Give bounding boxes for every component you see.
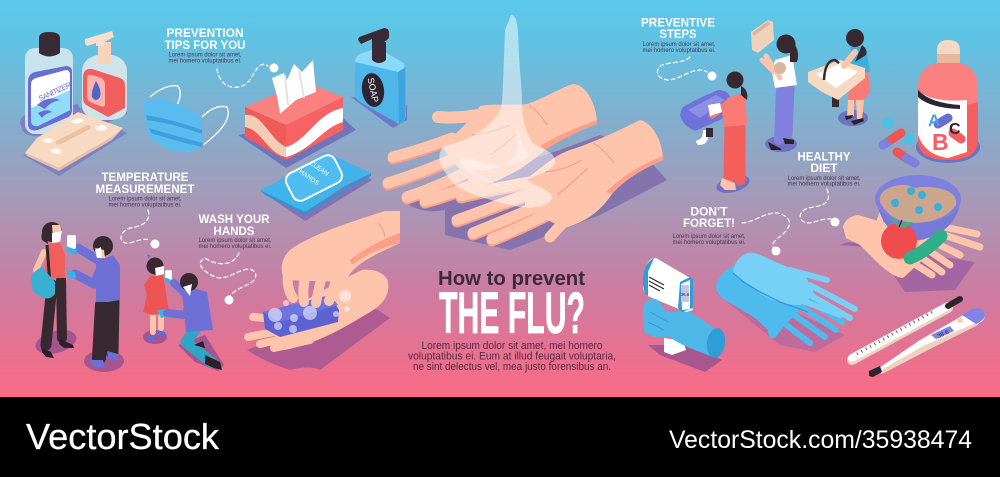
tip heading: temperature: mei homero voluptatibus ei. [108, 202, 182, 208]
icon: thermometers [852, 299, 985, 377]
tip heading: healthy diet [788, 150, 861, 188]
icon: rubber gloves [715, 253, 855, 352]
dashed connector: prevention [217, 64, 278, 87]
tip heading: healthy diet: HEALTHY [798, 150, 850, 164]
icon: infrared thermometer in glove: 36.6 [681, 292, 690, 297]
tip heading: temperature: TEMPERATURE [102, 170, 188, 184]
footer band: VectorStock.com/35938474 [669, 426, 972, 454]
tip heading: temperature [96, 170, 195, 208]
tip heading: temperature: MEASUREMENET [96, 182, 195, 196]
tip heading: preventive steps [641, 16, 716, 54]
title: THE FLU? [439, 281, 585, 346]
upper hand [388, 84, 597, 203]
person at sink [680, 72, 751, 196]
person at hand dryer [751, 20, 798, 152]
tip heading: wash your hands [198, 212, 272, 250]
illustration: hands under water [388, 84, 667, 250]
icon: pump bottle [80, 31, 127, 124]
tip heading: do not forget: mei homero voluptatibus ei. [672, 239, 746, 246]
tip heading: preventive steps: PREVENTIVE [641, 16, 715, 30]
tip heading: wash your hands: WASH YOUR [198, 212, 270, 226]
lower glove [716, 265, 842, 343]
footer band: VectorStock [26, 416, 220, 457]
water stream and puddle [439, 15, 555, 208]
upper glove [733, 253, 855, 318]
soap bar [263, 295, 339, 337]
tip heading: preventive steps: STEPS [660, 27, 696, 41]
tip heading: wash your hands: mei homero voluptatibus ei. [198, 243, 272, 250]
illustration: hand with food bowl [840, 175, 980, 292]
title description: Lorem ipsum dolor sit amet, mei homero [422, 340, 603, 352]
dashed connector: temperature [121, 210, 160, 248]
people: child temperature check [143, 254, 224, 371]
icon: vitamin bottle: C [949, 121, 961, 138]
title description [408, 340, 616, 373]
people: adult temperature check [31, 222, 124, 372]
tip heading: do not forget: FORGET! [683, 216, 735, 230]
icon: thermometers: 36.6 [937, 330, 951, 340]
dashed connector: preventive steps [657, 57, 716, 80]
tip heading: do not forget: DON’T [690, 204, 728, 218]
tip heading: prevention: TIPS FOR YOU [164, 38, 246, 52]
lower hand [457, 120, 663, 241]
dashed connector: healthy diet [800, 189, 840, 226]
icon: sanitizer bottle: SANITIZER [37, 80, 73, 103]
person at wash basin [808, 29, 870, 126]
tip heading: temperature: Lorem ipsum dolor sit amet, [108, 196, 182, 202]
tip heading: do not forget: Lorem ipsum dolor sit amet, [672, 233, 746, 240]
icon: soap dispenser [351, 28, 407, 128]
illustration: hands with soap [247, 211, 400, 370]
title [438, 267, 585, 346]
lower hand [248, 270, 388, 350]
upper hand [282, 211, 400, 303]
icon: vitamin bottle [882, 40, 980, 163]
icon: soap dispenser: SOAP [366, 77, 380, 103]
icon: clean hands wipes: CLEAN [308, 160, 330, 178]
tip heading: prevention: mei homero voluptatibus ei. [168, 58, 242, 64]
icon: clean hands wipes: HANDS [298, 168, 321, 188]
tip heading: do not forget [672, 204, 746, 246]
tip heading: preventive steps: mei homero voluptatibus ei. [642, 47, 716, 54]
title: How to prevent [438, 267, 585, 290]
icon: clean hands wipes [260, 152, 372, 221]
dashed connector: do not forget [742, 213, 789, 256]
footer band [0, 397, 1000, 477]
title description: voluptatibus ei. Eum at illud feugait voluptaria, [408, 350, 616, 362]
tip heading: healthy diet: DIET [810, 161, 838, 175]
title description: ne sint delectus vel, mea justo forensibus an. [413, 361, 611, 373]
tip heading: prevention: PREVENTION [166, 26, 244, 40]
tip heading: prevention: Lorem ipsum dolor sit amet, [168, 52, 242, 58]
icon: sanitizer bottle [20, 32, 84, 136]
icon: infrared thermometer in glove [643, 258, 727, 372]
dashed connector: wash hands [200, 253, 256, 304]
tip heading: healthy diet: Lorem ipsum dolor sit amet, [788, 175, 861, 182]
icon: vitamin bottle: A [928, 111, 940, 130]
icon: tissue box [238, 60, 356, 168]
icon: face mask [144, 86, 228, 153]
tip heading: wash your hands: Lorem ipsum dolor sit amet, [198, 237, 272, 244]
icon: wet wipes pack [23, 112, 127, 176]
tip heading: healthy diet: mei homero voluptatibus ei. [788, 180, 861, 188]
tip heading: prevention [164, 26, 246, 64]
icon: vitamin bottle: B [932, 129, 949, 155]
tip heading: preventive steps: Lorem ipsum dolor sit amet, [642, 41, 716, 48]
tip heading: wash your hands: HANDS [214, 224, 254, 238]
